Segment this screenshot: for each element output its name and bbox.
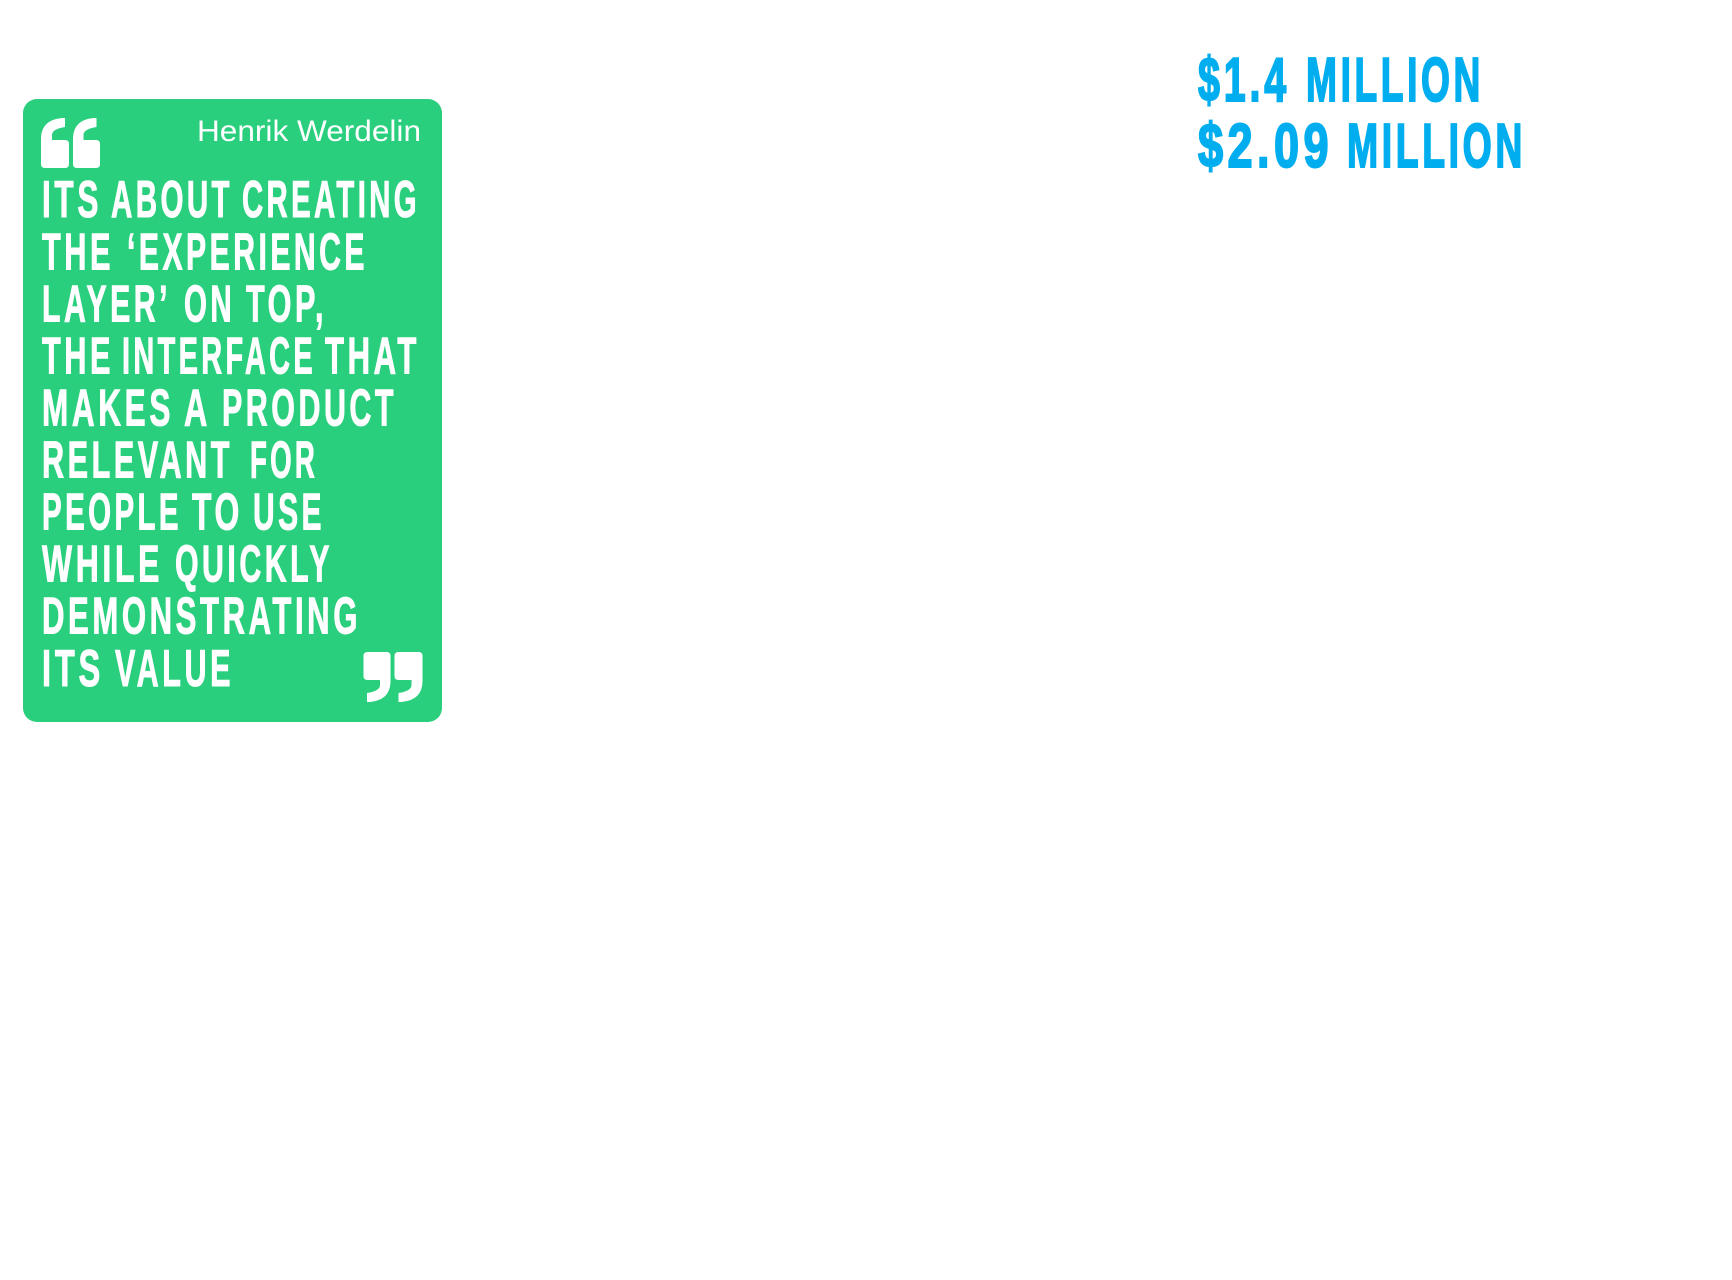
funding figures: $1.4	[1198, 46, 1290, 115]
funding figures: MILLION	[1347, 112, 1526, 181]
funding figures: $2.09	[1198, 112, 1333, 181]
quote text: ‘EXPERIENCE	[127, 224, 368, 282]
quote text: INTERFACE	[122, 328, 316, 386]
quote text: TO	[192, 484, 243, 542]
icon: opening quotation mark	[41, 118, 100, 168]
quote text: THAT	[325, 328, 420, 386]
funding figures: MILLION	[1306, 46, 1484, 115]
quote text: PEOPLE	[42, 484, 182, 542]
quote text: CREATING	[242, 171, 420, 229]
quote text: VALUE	[115, 640, 234, 698]
quote text: LAYER’	[42, 276, 171, 334]
quote text: MAKES	[42, 380, 174, 438]
quote text: ITS	[42, 640, 104, 698]
quote text: ITS	[42, 171, 102, 229]
quote text: A	[184, 380, 211, 438]
quote text: RELEVANT	[42, 432, 233, 490]
quote text: USE	[253, 484, 325, 542]
author name: Henrik Werdelin	[197, 115, 421, 148]
quote text: QUICKLY	[175, 536, 333, 594]
icon: closing quotation mark	[364, 652, 422, 702]
quote text: TOP,	[246, 276, 327, 334]
quote text: DEMONSTRATING	[42, 588, 361, 646]
quote text: FOR	[250, 432, 318, 490]
quote text: WHILE	[42, 536, 163, 594]
quote text: THE	[42, 328, 114, 386]
quote text: ON	[184, 276, 235, 334]
quote text	[42, 171, 420, 698]
card background	[23, 99, 442, 722]
panel: quote card	[23, 99, 442, 722]
quote text: THE	[42, 224, 114, 282]
quote text: PRODUCT	[222, 380, 397, 438]
quote text: ABOUT	[111, 171, 233, 229]
funding figures	[1198, 46, 1526, 181]
